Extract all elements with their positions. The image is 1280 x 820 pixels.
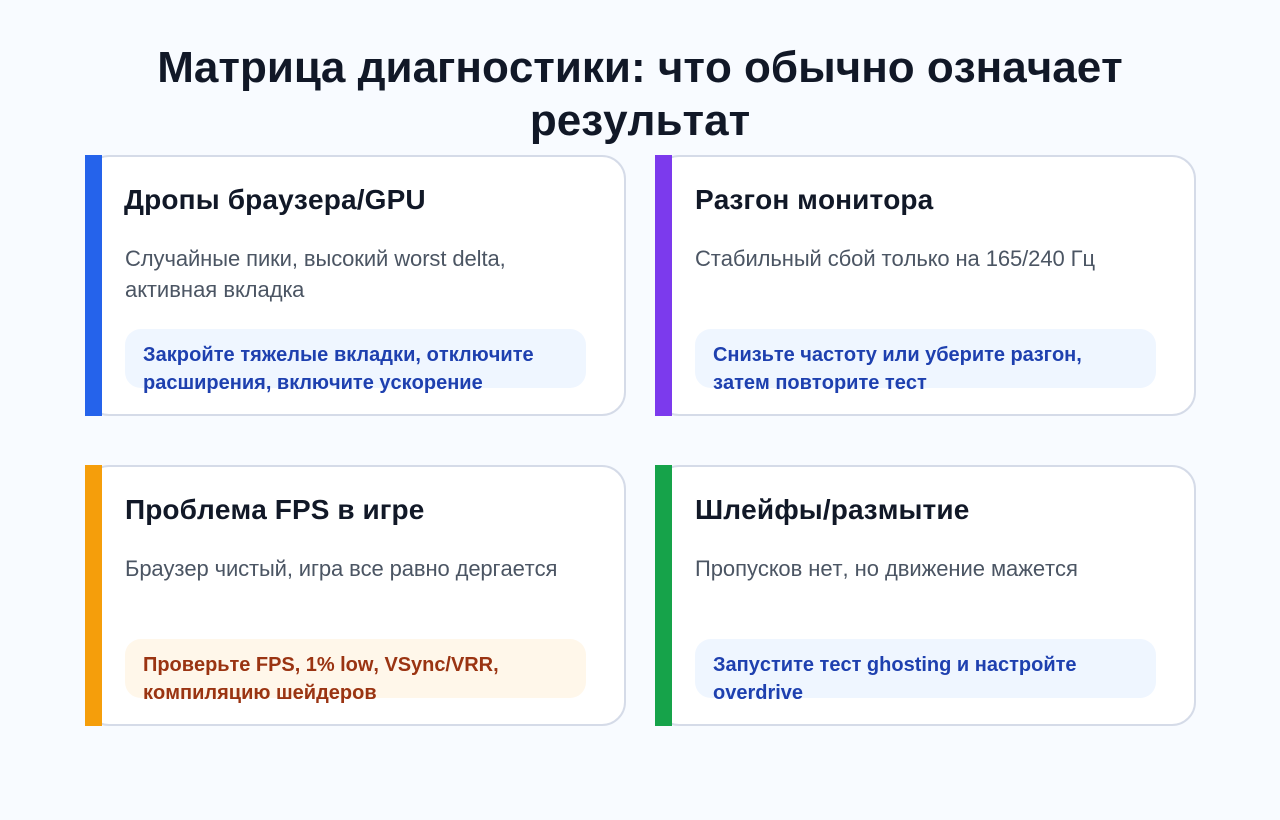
description: Случайные пики, высокий worst delta, (125, 246, 506, 271)
panel: in-game FPS problem (85, 465, 626, 726)
callout background (695, 639, 1156, 698)
description: Браузер чистый, игра все равно дергается (125, 556, 557, 581)
callout background (125, 329, 586, 388)
callout text (713, 344, 1082, 394)
callout text (143, 654, 499, 704)
heading: Разгон монитора (695, 184, 933, 215)
callout text: расширения, включите ускорение (143, 372, 483, 394)
callout text: Запустите тест ghosting и настройте (713, 654, 1077, 676)
description (125, 246, 506, 302)
description: Стабильный сбой только на 165/240 Гц (695, 246, 1095, 271)
panel: ghosting/blur (655, 465, 1196, 726)
callout text: компиляцию шейдеров (143, 682, 377, 704)
callout text: Закройте тяжелые вкладки, отключите (143, 344, 534, 366)
heading: Шлейфы/размытие (695, 494, 969, 525)
callout text: overdrive (713, 682, 803, 704)
callout text (713, 654, 1077, 704)
panel: monitor overclock (655, 155, 1196, 416)
callout background (695, 329, 1156, 388)
panel: browser/GPU drops (85, 155, 626, 416)
heading: Дропы браузера/GPU (124, 184, 426, 215)
title: Матрица диагностики: что обычно означает результат (157, 43, 1123, 145)
accent bar: purple (655, 155, 672, 416)
callout text: затем повторите тест (713, 372, 927, 394)
card background (85, 465, 626, 726)
card background (655, 465, 1196, 726)
callout text: Снизьте частоту или уберите разгон, (713, 344, 1082, 366)
callout background (125, 639, 586, 698)
description: Пропусков нет, но движение мажется (695, 556, 1078, 581)
card background (655, 155, 1196, 416)
callout text: Проверьте FPS, 1% low, VSync/VRR, (143, 654, 499, 676)
card background (85, 155, 626, 416)
heading: Проблема FPS в игре (125, 494, 424, 525)
description: активная вкладка (125, 277, 304, 302)
accent bar: green (655, 465, 672, 726)
accent bar: blue (85, 155, 102, 416)
callout text (143, 344, 534, 394)
accent bar: amber (85, 465, 102, 726)
